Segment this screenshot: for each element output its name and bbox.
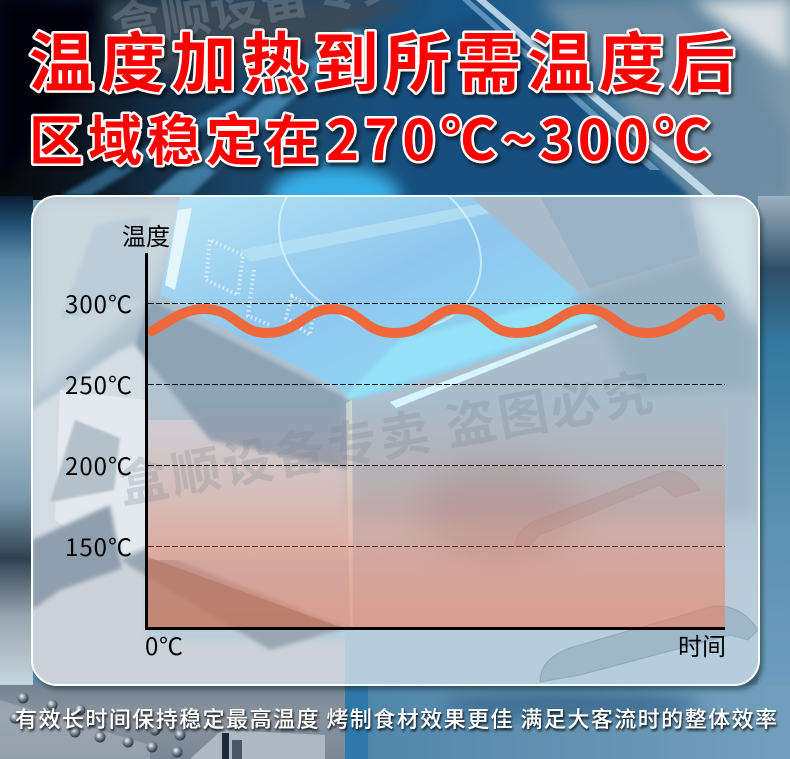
grid line 250 xyxy=(148,384,725,386)
dot-matrix display on griddle xyxy=(206,240,314,335)
title xyxy=(29,11,735,177)
grid line 300 xyxy=(148,302,725,304)
grid line 200 xyxy=(148,464,725,466)
panel: temperature chart card xyxy=(31,195,760,686)
watermark: centre: 盒顺设备专卖 盗图必究 xyxy=(112,352,661,518)
title line 2 xyxy=(29,96,710,177)
temperature curve xyxy=(152,309,720,333)
panel border xyxy=(32,196,759,685)
icon: griddle handle upper xyxy=(515,471,700,546)
label 200: 200℃ xyxy=(65,447,132,482)
y axis xyxy=(145,253,148,630)
y axis title: 温度 xyxy=(122,217,170,252)
label 300: 300℃ xyxy=(65,285,132,320)
label 0: 0℃ xyxy=(145,627,183,662)
caption: 有效长时间保持稳定最高温度 烤制食材效果更佳 满足大客流时的整体效率 xyxy=(15,702,777,734)
x axis xyxy=(145,627,725,630)
x axis title: 时间 xyxy=(678,627,726,662)
panel background scene xyxy=(33,197,758,684)
label 150: 150℃ xyxy=(65,528,132,563)
title line 2: 区域稳定在 xyxy=(29,97,319,176)
chart shadow wedge xyxy=(148,557,340,627)
grid line 150 xyxy=(148,546,725,548)
chart: temperature over time xyxy=(65,217,726,662)
chart area warm gradient xyxy=(148,400,725,627)
title line 2: 270℃~300℃ xyxy=(326,96,710,177)
icon: griddle handle lower xyxy=(540,606,758,682)
title line 1: 温度加热到所需温度后 xyxy=(29,11,735,105)
label 250: 250℃ xyxy=(65,366,132,401)
icon: steel balls of the griddle edge xyxy=(10,692,186,758)
